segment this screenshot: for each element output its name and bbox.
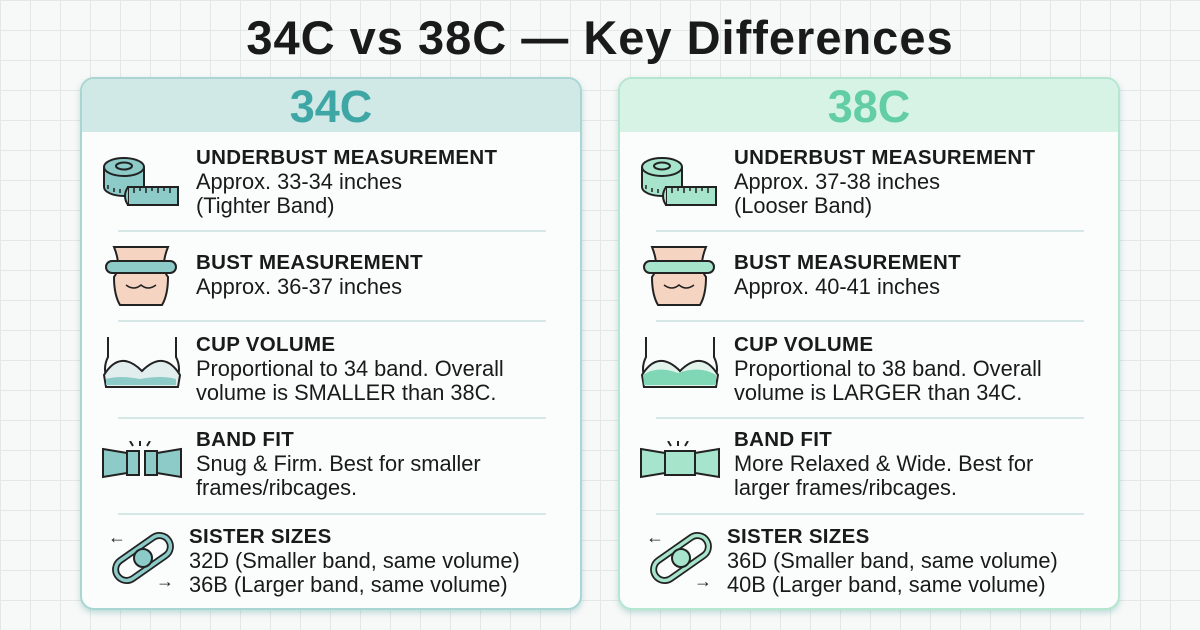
text: bust — [196, 251, 423, 299]
text: sister sizes: SISTER SIZES — [727, 525, 870, 548]
text: sister sizes: 36B (Larger band, same volume) — [189, 572, 508, 597]
icon: bust torso — [643, 246, 715, 306]
text: cup volume: volume is SMALLER than 38C. — [196, 380, 496, 405]
text: sister sizes: 40B (Larger band, same volume) — [727, 572, 1046, 597]
panel header 38C — [620, 79, 1118, 132]
icon: chain link: ← — [108, 527, 126, 547]
text: band fit — [734, 428, 1033, 500]
text: bust — [734, 251, 961, 299]
icon: bra — [103, 337, 181, 388]
text: band fit: larger frames/ribcages. — [734, 475, 957, 500]
text: cup volume: Proportional to 34 band. Overall — [196, 356, 504, 381]
text: band fit: frames/ribcages. — [196, 475, 357, 500]
icon: tape measure — [641, 157, 717, 206]
text: underbust: (Tighter Band) — [196, 193, 335, 218]
icon: tape measure — [103, 157, 179, 206]
text: underbust: UNDERBUST MEASUREMENT — [734, 146, 1035, 169]
text: cup volume: CUP VOLUME — [734, 333, 873, 356]
text: cup volume — [196, 333, 504, 405]
icon: belt buckle — [102, 441, 182, 478]
text: cup volume: CUP VOLUME — [196, 333, 335, 356]
text: bust: Approx. 40-41 inches — [734, 274, 940, 299]
icon: chain link: → — [156, 571, 174, 591]
text: bust: Approx. 36-37 inches — [196, 274, 402, 299]
text: sister sizes: SISTER SIZES — [189, 525, 332, 548]
text: cup volume: Proportional to 38 band. Overall — [734, 356, 1042, 381]
text: sister sizes — [727, 525, 1058, 597]
text: sister sizes — [189, 525, 520, 597]
icon: chain link — [646, 527, 712, 591]
icon: chain link — [108, 527, 174, 591]
panel header 34C: 34C — [290, 81, 372, 132]
icon: bust torso — [105, 246, 177, 306]
icon: chain link: → — [694, 571, 712, 591]
panel: 38C — [618, 77, 1120, 610]
text: bust: BUST MEASUREMENT — [196, 251, 423, 274]
text: bust: BUST MEASUREMENT — [734, 251, 961, 274]
icon: chain link: ← — [646, 527, 664, 547]
icon: bra — [641, 337, 719, 388]
panel header 34C — [82, 79, 580, 132]
text: band fit: BAND FIT — [734, 428, 832, 451]
text: sister sizes: 32D (Smaller band, same volume) — [189, 548, 520, 573]
panel: 34C — [80, 77, 582, 610]
title: 34C vs 38C — Key Differences — [246, 11, 954, 64]
text: band fit: BAND FIT — [196, 428, 294, 451]
text: underbust — [734, 146, 1035, 218]
text: underbust: (Looser Band) — [734, 193, 872, 218]
text: underbust: UNDERBUST MEASUREMENT — [196, 146, 497, 169]
text: underbust: Approx. 37-38 inches — [734, 169, 940, 194]
icon: belt buckle — [640, 441, 720, 478]
text: band fit: More Relaxed & Wide. Best for — [734, 451, 1033, 476]
text: band fit — [196, 428, 481, 500]
text: underbust — [196, 146, 497, 218]
text: cup volume — [734, 333, 1042, 405]
text: underbust: Approx. 33-34 inches — [196, 169, 402, 194]
panel header 38C: 38C — [828, 81, 910, 132]
text: sister sizes: 36D (Smaller band, same volume) — [727, 548, 1058, 573]
text: band fit: Snug & Firm. Best for smaller — [196, 451, 481, 476]
text: cup volume: volume is LARGER than 34C. — [734, 380, 1022, 405]
